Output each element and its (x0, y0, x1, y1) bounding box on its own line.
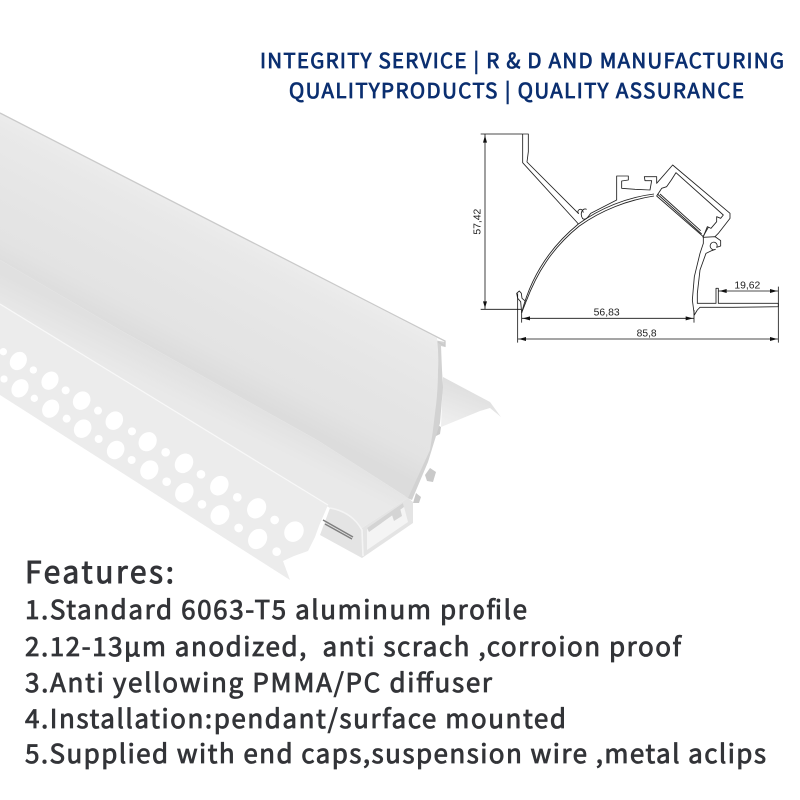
features list: 3.Anti yellowing PMMA/PC diffuser (25, 663, 493, 700)
channel inner slot (367, 503, 404, 532)
flange highlight (0, 304, 328, 505)
header tagline (260, 44, 784, 104)
dimension labels: 19,62 (734, 281, 761, 292)
dimension labels: 56,83 (594, 308, 620, 319)
technical cross-section drawing (473, 134, 778, 343)
diffuser top edge (0, 113, 445, 346)
header tagline: INTEGRITY SERVICE | R & D AND MANUFACTURING (260, 44, 784, 74)
lower band (0, 260, 408, 528)
flange holes (0, 348, 308, 556)
channel end arc (330, 508, 363, 556)
perforated plaster flange (0, 304, 328, 580)
rear wing (441, 377, 501, 427)
header tagline: QUALITYPRODUCTS | QUALITY ASSURANCE (289, 74, 744, 104)
features list: 5.Supplied with end caps,suspension wire ,metal aclips (25, 734, 766, 771)
metal clip (323, 520, 353, 539)
features list: 1.Standard 6063-T5 aluminum profile (25, 590, 527, 627)
dimension labels (473, 208, 761, 340)
features list (25, 590, 766, 771)
diffuser surface (0, 113, 438, 498)
product photo: aluminum profile with diffuser (0, 113, 501, 580)
profile outline (517, 134, 778, 315)
dimension arrows (483, 135, 777, 341)
diffuser end strip (405, 340, 445, 500)
features list: 2.12-13μm anodized, anti scrach ,corroion proof (25, 627, 683, 664)
dimension lines (481, 134, 778, 343)
features list: 4.Installation:pendant/surface mounted (25, 699, 566, 736)
features heading: Features: (25, 548, 174, 592)
channel opening (367, 503, 408, 550)
dimension labels: 85,8 (637, 329, 657, 340)
mounting teeth (413, 424, 441, 503)
dimension labels: 57,42 (473, 208, 484, 235)
channel body (320, 498, 413, 558)
